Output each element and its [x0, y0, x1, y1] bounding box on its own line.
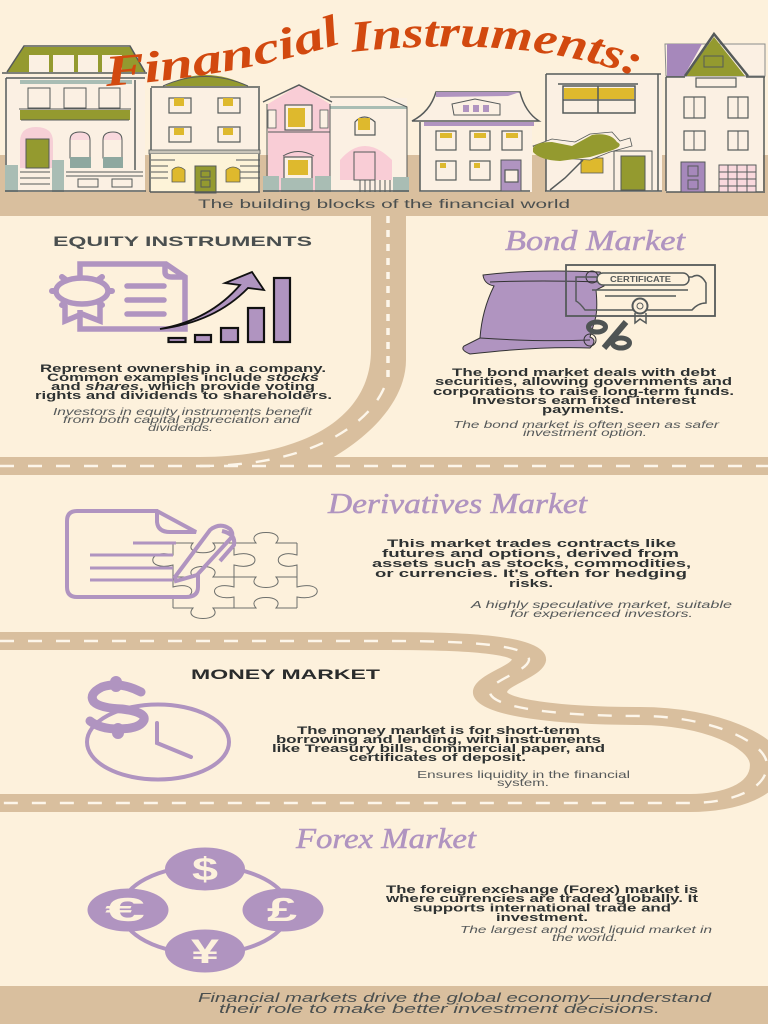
note: forex: the world. — [552, 933, 618, 944]
house 6 — [665, 34, 765, 192]
body text: bond: Investors earn fixed interest — [472, 395, 697, 407]
panel: derivatives market — [67, 489, 733, 620]
body text: bond — [433, 367, 734, 416]
house 3 pink and annex — [263, 85, 409, 192]
title: Financial — [106, 14, 338, 86]
house 4 — [412, 92, 539, 192]
body text: derivatives: This market trades contracts like — [387, 538, 676, 550]
body text: derivatives: or currencies. It's often for hedging — [375, 568, 687, 580]
note: bond: investment option. — [523, 428, 647, 439]
heading: forex market: Forex Market — [295, 824, 477, 855]
house 1 — [2, 46, 147, 192]
panel: bond market — [433, 226, 734, 439]
icon: document — [67, 511, 198, 597]
note: equity: Investors in equity instruments benefit — [53, 407, 314, 418]
body text: forex: The foreign exchange (Forex) market is — [386, 884, 698, 896]
footer band: Financial markets drive the global economy—understand — [198, 990, 712, 1005]
illustration: row of houses — [2, 34, 765, 193]
note: forex — [460, 925, 712, 944]
footer band — [0, 986, 768, 1024]
panel: forex market — [88, 824, 712, 972]
body text: money market: borrowing and lending, with instruments — [276, 734, 601, 746]
body text: equity: Represent ownership in a company. — [40, 363, 326, 375]
body text: money market — [272, 725, 605, 764]
heading: equity instruments: EQUITY INSTRUMENTS — [53, 233, 312, 249]
bar chart with rising arrow — [160, 272, 290, 342]
icon: clock with dollar sign — [87, 682, 229, 780]
icon: currency ring: ¥ — [191, 933, 219, 971]
icon: currency ring: € — [105, 891, 145, 928]
footer band: their role to make better investment decisions. — [219, 1001, 660, 1016]
body text: equity — [35, 363, 332, 402]
title: Instruments: — [352, 21, 640, 74]
icon: currency ring — [88, 848, 324, 972]
note: derivatives: A highly speculative market, suitable — [469, 600, 733, 611]
note: bond: The bond market is often seen as safer — [453, 420, 720, 431]
house 5 with tree — [533, 74, 662, 192]
note: derivatives: for experienced investors. — [510, 609, 693, 620]
body text: money market: The money market is for short-term — [297, 725, 580, 737]
icon: certificate: CERTIFICATE — [610, 275, 672, 284]
subtitle: The building blocks of the financial world — [198, 199, 570, 211]
panel: money market — [87, 666, 630, 789]
note: equity: from both capital appreciation and — [63, 415, 301, 426]
body text: derivatives — [372, 538, 691, 590]
body text: derivatives: assets such as stocks, commodities, — [372, 558, 691, 570]
body text: money market: certificates of deposit. — [349, 752, 526, 764]
body text: forex — [384, 884, 699, 924]
note: derivatives — [469, 600, 733, 620]
body text: equity: Common examples include stocks — [47, 372, 319, 384]
body text: equity: and shares , which provide voting — [51, 381, 315, 393]
heading: money market: MONEY MARKET — [191, 666, 381, 682]
note: money market — [417, 770, 630, 789]
road network — [0, 216, 768, 803]
body text: bond: The bond market deals with debt — [452, 367, 717, 379]
body text: money market: like Treasury bills, commercial paper, and — [272, 743, 605, 755]
note: equity: dividends. — [148, 423, 213, 434]
body text: forex: where currencies are traded globally. It — [384, 893, 699, 905]
icon: scroll — [463, 271, 604, 354]
body text: derivatives: risks. — [509, 578, 553, 590]
note: bond — [453, 420, 720, 439]
body text: derivatives: futures and options, derived from — [382, 548, 679, 560]
icon: certificate — [566, 265, 715, 323]
note: forex: The largest and most liquid market in — [460, 925, 712, 936]
title — [106, 14, 640, 86]
icon: pencil — [175, 526, 234, 581]
body text: bond: payments. — [542, 404, 624, 416]
ground band behind the houses — [0, 155, 768, 216]
heading: bond market: Bond Market — [505, 226, 686, 257]
panel: equity instruments — [35, 233, 332, 434]
body text: forex: supports international trade and — [413, 902, 671, 914]
body text: forex: investment. — [496, 912, 588, 924]
note: money market: system. — [497, 778, 549, 789]
body text: bond: corporations to raise long-term funds. — [433, 386, 734, 398]
icon: puzzle pieces — [153, 532, 317, 618]
icon: currency ring: £ — [267, 891, 298, 928]
body text: equity: rights and dividends to shareholders. — [35, 390, 332, 402]
house 2 — [149, 75, 260, 193]
note: money market: Ensures liquidity in the financial — [417, 770, 630, 781]
note: equity — [53, 407, 314, 434]
icon: percent sign — [588, 322, 630, 348]
icon: currency ring: $ — [192, 851, 218, 887]
body text: bond: securities, allowing governments and — [435, 376, 732, 388]
heading: derivatives market: Derivatives Market — [327, 489, 588, 520]
icon: certificate document — [52, 264, 185, 329]
